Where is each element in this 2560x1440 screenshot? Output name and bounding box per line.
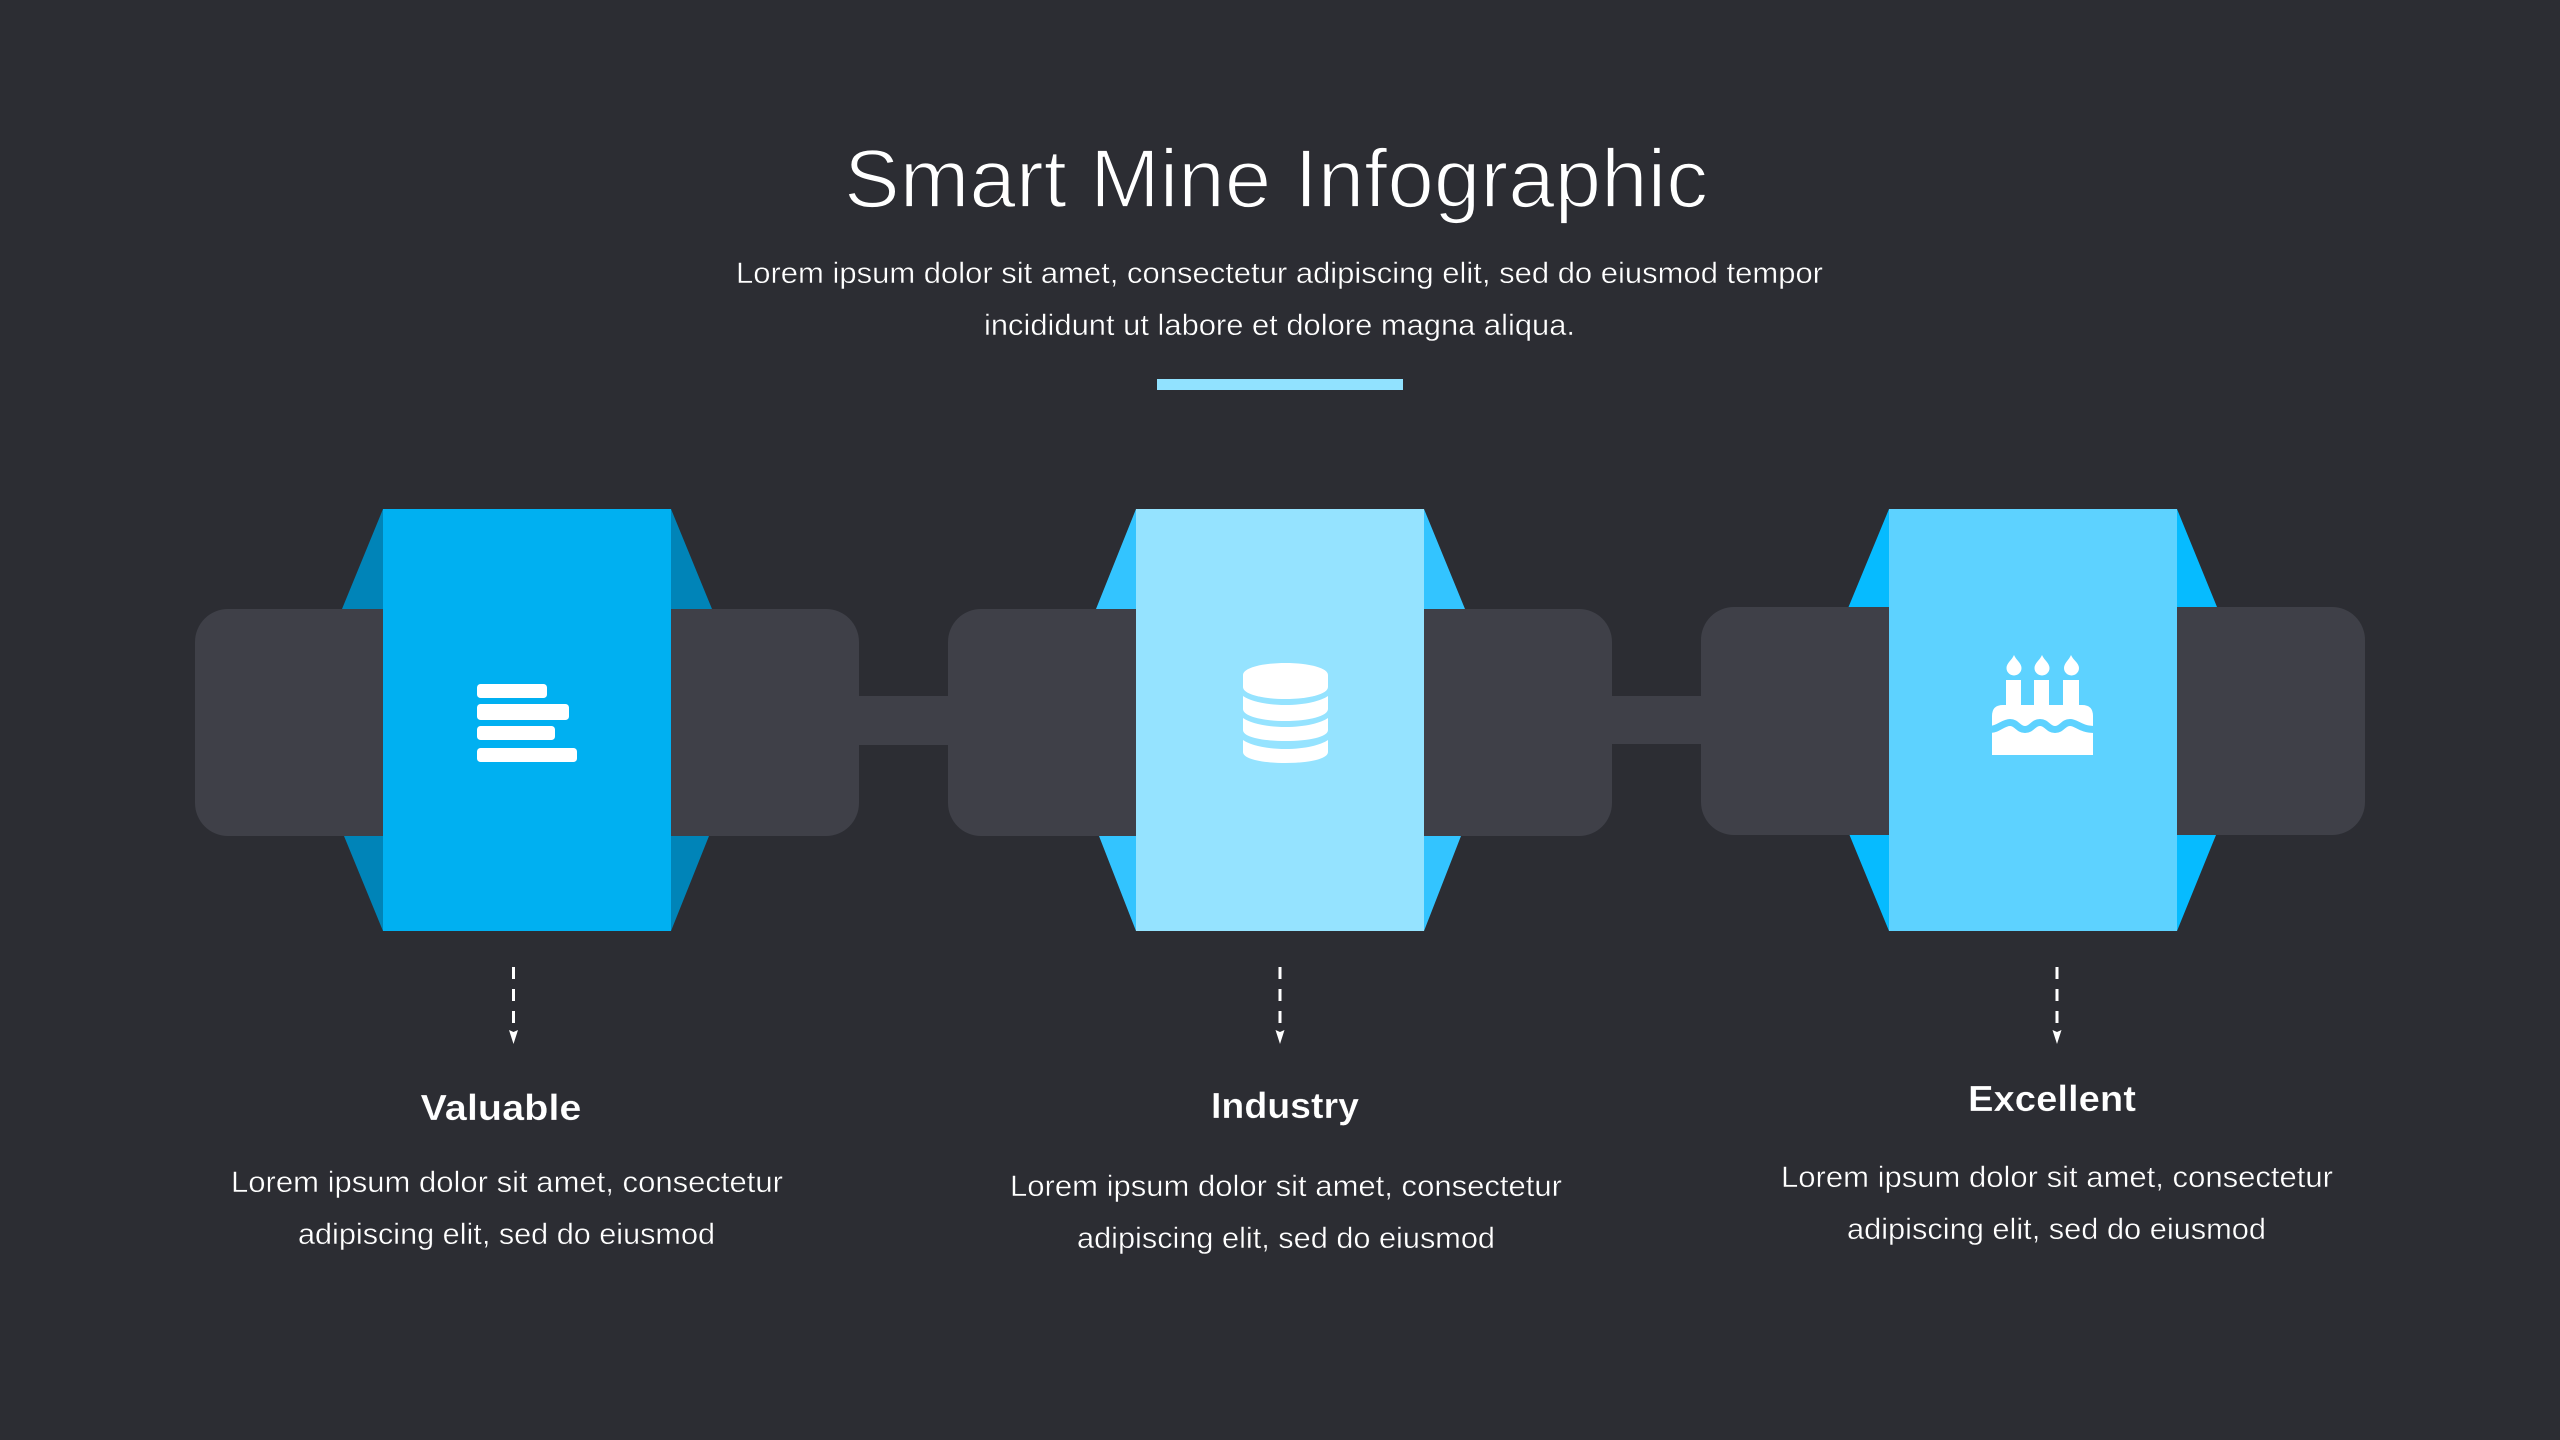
description: valuable xyxy=(231,1166,783,1251)
arrow: valuable xyxy=(509,967,518,1044)
sky blue card xyxy=(1889,509,2177,931)
arrow: excellent xyxy=(2052,967,2062,1044)
grey base xyxy=(948,609,1612,836)
description: excellent: Lorem ipsum dolor sit amet, consectetur xyxy=(1781,1161,2333,1194)
description: excellent: adipiscing elit, sed do eiusmod xyxy=(1847,1213,2266,1246)
title: Smart Mine Infographic xyxy=(844,132,1708,225)
panel: industry block xyxy=(948,509,1612,931)
icon: database xyxy=(1243,663,1328,763)
side triangles xyxy=(1848,509,2217,931)
text block: valuable xyxy=(231,1087,783,1251)
dark side triangles xyxy=(342,509,712,931)
description: industry: Lorem ipsum dolor sit amet, consectetur xyxy=(1010,1170,1562,1203)
text block: industry xyxy=(1010,1085,1562,1255)
description: valuable: Lorem ipsum dolor sit amet, consectetur xyxy=(231,1166,783,1199)
description: valuable: adipiscing elit, sed do eiusmod xyxy=(298,1218,715,1251)
description: excellent xyxy=(1781,1161,2333,1246)
arrow: industry xyxy=(1276,967,1284,1044)
description: industry: adipiscing elit, sed do eiusmod xyxy=(1077,1222,1495,1255)
heading: excellent: Excellent xyxy=(1968,1078,2136,1119)
light blue card xyxy=(1136,509,1424,931)
grey base xyxy=(1701,607,2365,835)
icon: text lines xyxy=(477,684,577,762)
description: industry xyxy=(1010,1170,1562,1255)
icon: birthday cake xyxy=(1990,655,2095,755)
heading: industry: Industry xyxy=(1211,1085,1359,1126)
connector: second to third block xyxy=(1600,696,1710,744)
grey base xyxy=(195,609,859,836)
panel: valuable block xyxy=(195,509,859,931)
blue card xyxy=(383,509,671,931)
panel: excellent block xyxy=(1701,509,2365,931)
subtitle text block xyxy=(736,257,1823,342)
connector: first to second block xyxy=(850,696,960,745)
text block: excellent xyxy=(1781,1078,2333,1246)
accent bar under subtitle xyxy=(1157,379,1403,390)
heading: valuable: Valuable xyxy=(420,1087,582,1128)
subtitle text block: Lorem ipsum dolor sit amet, consectetur adipiscing elit, sed do eiusmod tempor xyxy=(736,257,1823,290)
side triangles xyxy=(1096,509,1465,931)
subtitle text block: incididunt ut labore et dolore magna aliqua. xyxy=(984,309,1575,342)
